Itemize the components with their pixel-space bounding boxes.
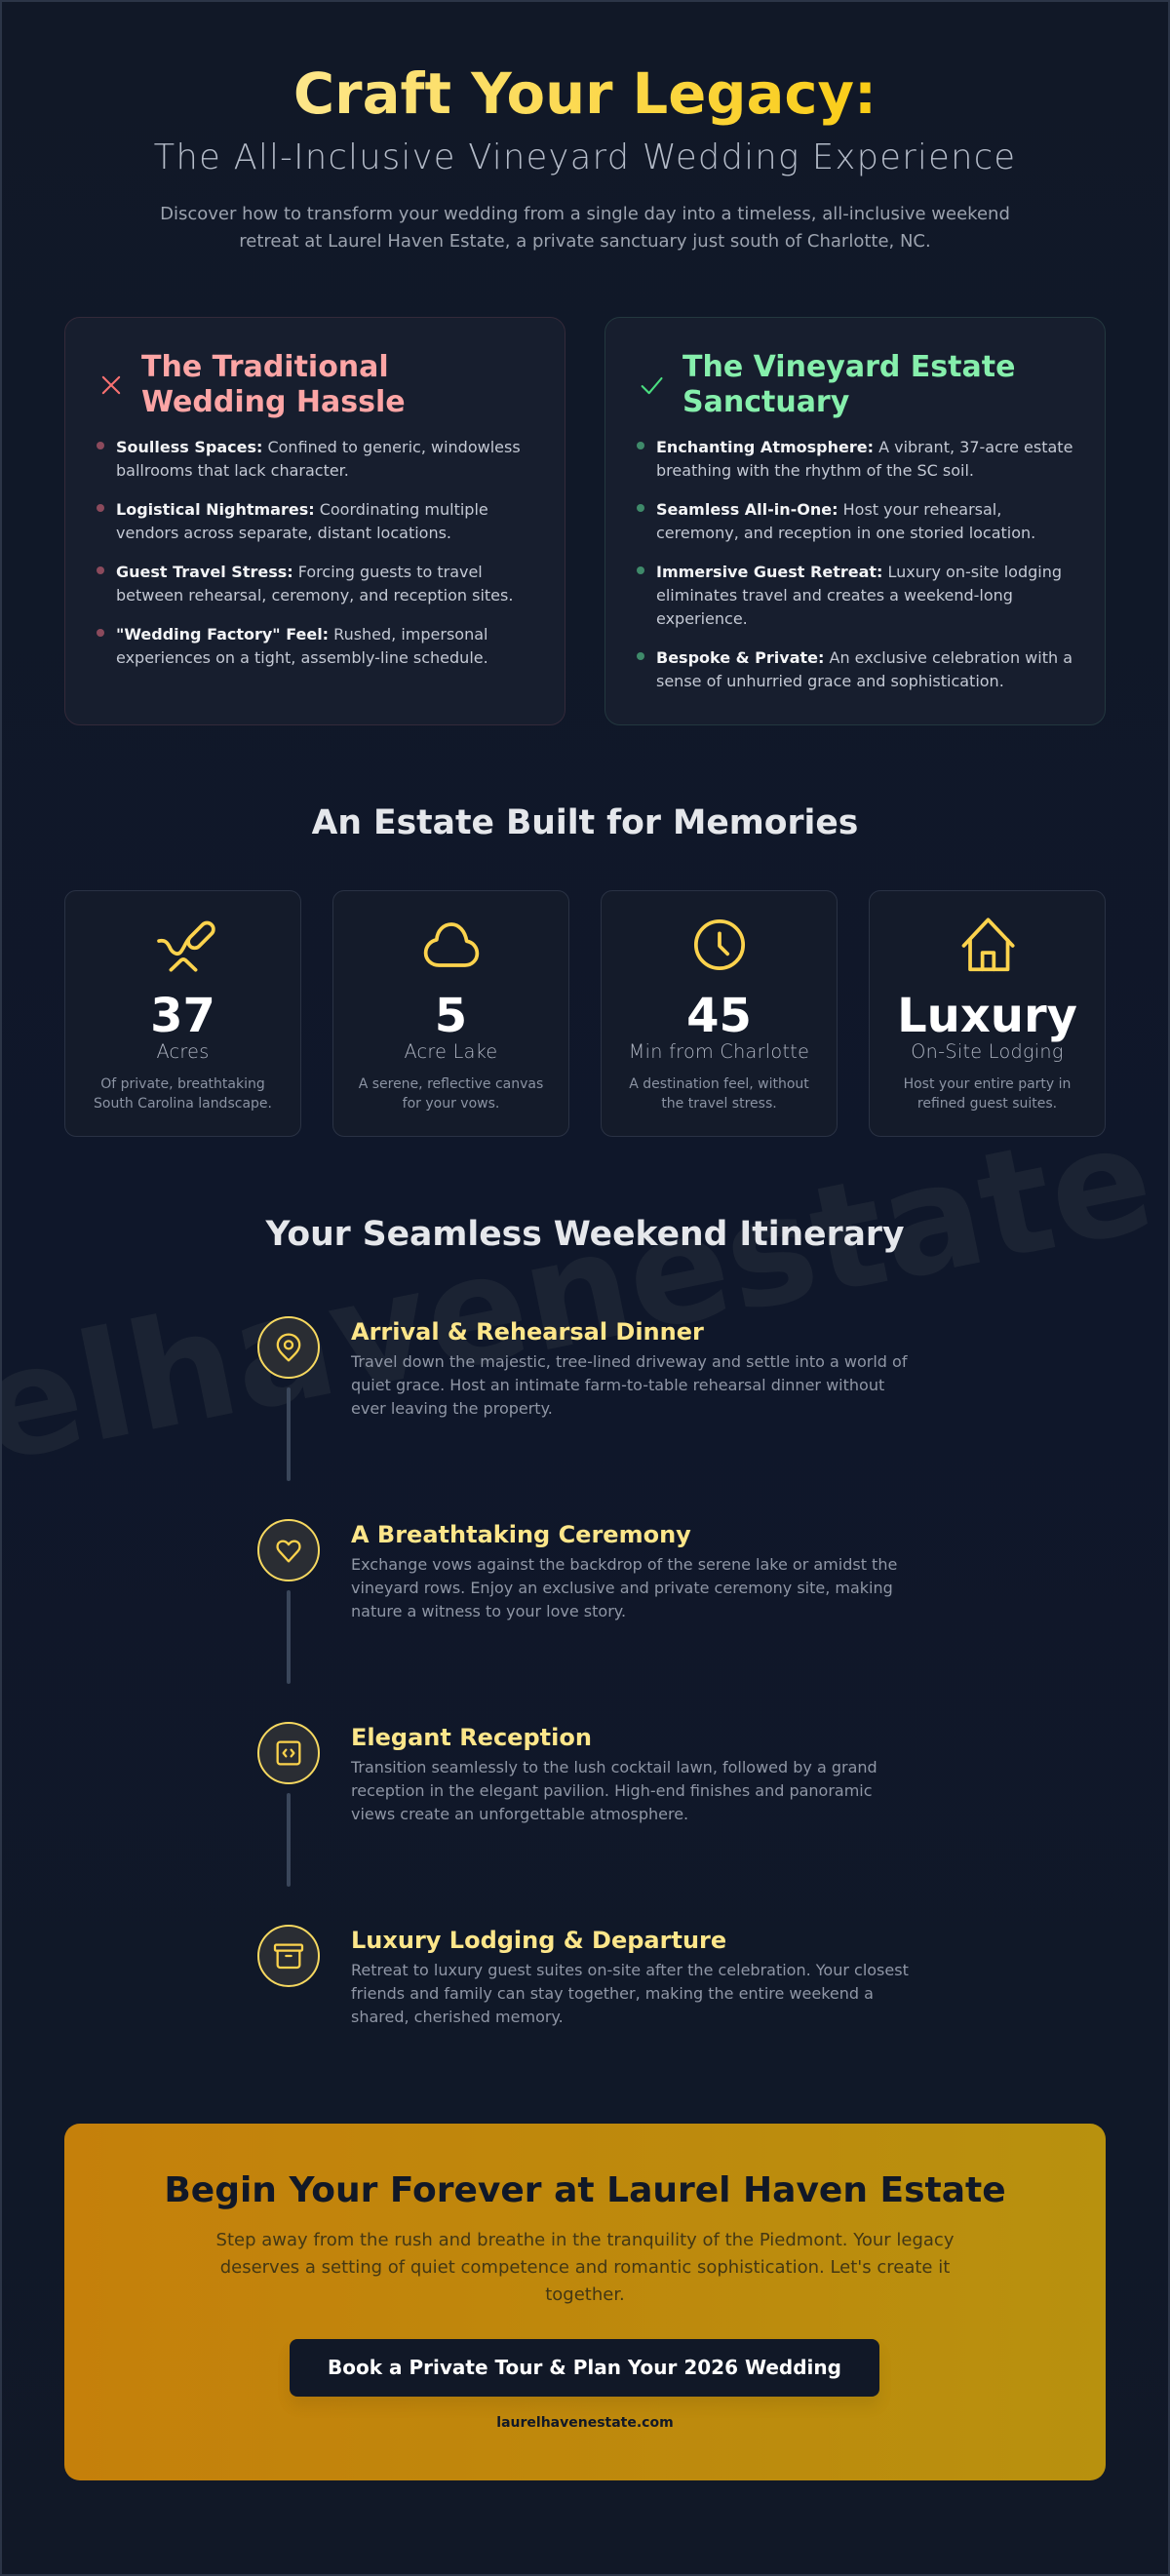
bullet 1: Soulless Spaces: Confined to generic, windowless bbox=[116, 437, 521, 456]
step text: Retreat to luxury guest suites on-site after the celebration. Your closest bbox=[351, 1961, 909, 1979]
icon: code square bbox=[257, 1722, 320, 1784]
icon: cross bbox=[101, 376, 121, 394]
description: Host your entire party in bbox=[904, 1076, 1071, 1092]
icon: map pin bbox=[257, 1316, 320, 1379]
bullet 2 bbox=[116, 499, 488, 542]
label: Acres bbox=[156, 1040, 210, 1063]
bullet 3: eliminates travel and creates a weekend-long bbox=[656, 585, 1013, 605]
intro text: Discover how to transform your wedding from a single day into a timeless, all-inclusive weekend bbox=[160, 204, 1010, 224]
value: 5 bbox=[435, 989, 467, 1043]
intro text: retreat at Laurel Haven Estate, a private sanctuary just south of Charlotte, NC. bbox=[239, 231, 931, 252]
bullet 2: Logistical Nightmares: Coordinating multiple bbox=[116, 499, 488, 519]
icon: clock bbox=[694, 919, 745, 970]
timeline step 3 bbox=[257, 1722, 878, 1887]
step title: Arrival & Rehearsal Dinner bbox=[351, 1318, 704, 1346]
description bbox=[359, 1076, 543, 1112]
bullet 1 bbox=[116, 437, 521, 480]
icon: archive box bbox=[257, 1925, 320, 1987]
description bbox=[94, 1076, 272, 1112]
bullet 2: Seamless All-in-One: Host your rehearsal, bbox=[656, 499, 1001, 519]
cta button bbox=[290, 2339, 879, 2397]
step text bbox=[351, 1961, 909, 2026]
bullet 4 bbox=[116, 624, 488, 667]
cta heading: Begin Your Forever at Laurel Haven Estate bbox=[164, 2170, 1006, 2210]
step text: friends and family can stay together, making the entire weekend a bbox=[351, 1984, 874, 2003]
heading: itinerary: Your Seamless Weekend Itinerary bbox=[265, 1215, 905, 1254]
step text: Exchange vows against the backdrop of the serene lake or amidst the bbox=[351, 1555, 897, 1574]
panel: traditional wedding hassle bbox=[64, 317, 566, 725]
step text: quiet grace. Host an intimate farm-to-table rehearsal dinner without bbox=[351, 1376, 884, 1394]
bullet 3: between rehearsal, ceremony, and reception sites. bbox=[116, 585, 513, 605]
stat card: acres bbox=[64, 890, 301, 1137]
connector bbox=[287, 1387, 291, 1481]
icon: heart bbox=[257, 1519, 320, 1581]
description: A destination feel, without bbox=[629, 1076, 809, 1092]
description: South Carolina landscape. bbox=[94, 1096, 272, 1112]
cta text: Step away from the rush and breathe in the tranquility of the Piedmont. Your legacy bbox=[216, 2229, 954, 2250]
heading: Wedding Hassle bbox=[141, 384, 406, 419]
step title: Luxury Lodging & Departure bbox=[351, 1927, 726, 1954]
cta text: together. bbox=[545, 2283, 625, 2305]
value: 45 bbox=[686, 989, 752, 1043]
step title: A Breathtaking Ceremony bbox=[351, 1521, 691, 1548]
bullet list bbox=[637, 437, 1072, 690]
step text: reception in the elegant pavilion. High-end finishes and panoramic bbox=[351, 1781, 873, 1800]
label: Acre Lake bbox=[404, 1040, 498, 1063]
step text bbox=[351, 1352, 908, 1418]
step text: vineyard rows. Enjoy an exclusive and private ceremony site, making bbox=[351, 1579, 893, 1597]
step text: nature a witness to your love story. bbox=[351, 1602, 626, 1620]
step text bbox=[351, 1555, 897, 1620]
label: On-Site Lodging bbox=[911, 1040, 1064, 1063]
website: laurelhavenestate.com bbox=[496, 2415, 674, 2431]
bullet 3 bbox=[656, 562, 1062, 628]
step title: Elegant Reception bbox=[351, 1724, 592, 1751]
bullet 1: Enchanting Atmosphere: A vibrant, 37-acre estate bbox=[656, 437, 1072, 456]
subtitle: The All-Inclusive Vineyard Wedding Experience bbox=[154, 137, 1016, 177]
stat card: lodging bbox=[869, 890, 1106, 1137]
bullet 3: Guest Travel Stress: Forcing guests to travel bbox=[116, 562, 483, 581]
icon: cloud bbox=[423, 922, 480, 967]
value: Luxury bbox=[897, 989, 1077, 1043]
heading: The Vineyard Estate bbox=[682, 350, 1015, 384]
heading bbox=[682, 350, 1015, 419]
description: Of private, breathtaking bbox=[100, 1076, 265, 1092]
bullet 2: vendors across separate, distant locations. bbox=[116, 523, 451, 542]
label: Min from Charlotte bbox=[629, 1040, 809, 1063]
bullet 4: "Wedding Factory" Feel: Rushed, impersonal bbox=[116, 624, 488, 644]
description bbox=[629, 1076, 809, 1112]
connector bbox=[287, 1590, 291, 1684]
heading: The Traditional bbox=[141, 350, 389, 384]
bullet 1: ballrooms that lack character. bbox=[116, 460, 349, 480]
icon: check bbox=[642, 376, 663, 394]
bullet 2: ceremony, and reception in one storied location. bbox=[656, 523, 1035, 542]
header bbox=[154, 61, 1016, 252]
bullet 3: experience. bbox=[656, 608, 748, 628]
description bbox=[904, 1076, 1071, 1112]
panel: vineyard estate sanctuary bbox=[604, 317, 1106, 725]
connector bbox=[287, 1793, 291, 1887]
bullet 1: breathing with the rhythm of the SC soil. bbox=[656, 460, 974, 480]
call to action panel bbox=[64, 2124, 1106, 2480]
step text bbox=[351, 1758, 878, 1823]
heading bbox=[141, 350, 406, 419]
icon: vine bbox=[157, 920, 215, 972]
step text: ever leaving the property. bbox=[351, 1399, 553, 1418]
intro text bbox=[160, 204, 1010, 252]
timeline step 1 bbox=[257, 1316, 908, 1481]
value: 37 bbox=[150, 989, 215, 1043]
description: A serene, reflective canvas bbox=[359, 1076, 543, 1092]
bullet 4: experiences on a tight, assembly-line schedule. bbox=[116, 647, 488, 667]
stat card: distance bbox=[601, 890, 838, 1137]
stat card: lake bbox=[332, 890, 569, 1137]
heading: Sanctuary bbox=[682, 384, 849, 419]
step text: Travel down the majestic, tree-lined driveway and settle into a world of bbox=[351, 1352, 907, 1371]
title: Craft Your Legacy: bbox=[293, 61, 877, 127]
bullet 1 bbox=[656, 437, 1072, 480]
bullet 2 bbox=[656, 499, 1035, 542]
timeline step 2 bbox=[257, 1519, 897, 1684]
bullet 3: Immersive Guest Retreat: Luxury on-site lodging bbox=[656, 562, 1062, 581]
cta text: deserves a setting of quiet competence and romantic sophistication. Let's create it bbox=[220, 2256, 950, 2278]
bullet 4: sense of unhurried grace and sophistication. bbox=[656, 671, 1004, 690]
description: the travel stress. bbox=[661, 1096, 777, 1112]
description: refined guest suites. bbox=[917, 1096, 1057, 1112]
bullet 4: Bespoke & Private: An exclusive celebration with a bbox=[656, 647, 1072, 667]
bullet 3 bbox=[116, 562, 513, 605]
step text: shared, cherished memory. bbox=[351, 2008, 564, 2026]
description: for your vows. bbox=[403, 1096, 499, 1112]
step text: Transition seamlessly to the lush cocktail lawn, followed by a grand bbox=[351, 1758, 878, 1776]
heading: estate: An Estate Built for Memories bbox=[312, 803, 858, 842]
timeline step 4 bbox=[257, 1925, 909, 2026]
bullet list bbox=[97, 437, 521, 667]
bullet 4 bbox=[656, 647, 1072, 690]
cta text bbox=[216, 2229, 954, 2305]
icon: house bbox=[961, 917, 1015, 971]
step text: views create an unforgettable atmosphere. bbox=[351, 1805, 688, 1823]
cta button: Book a Private Tour & Plan Your 2026 Wedding bbox=[328, 2356, 841, 2379]
